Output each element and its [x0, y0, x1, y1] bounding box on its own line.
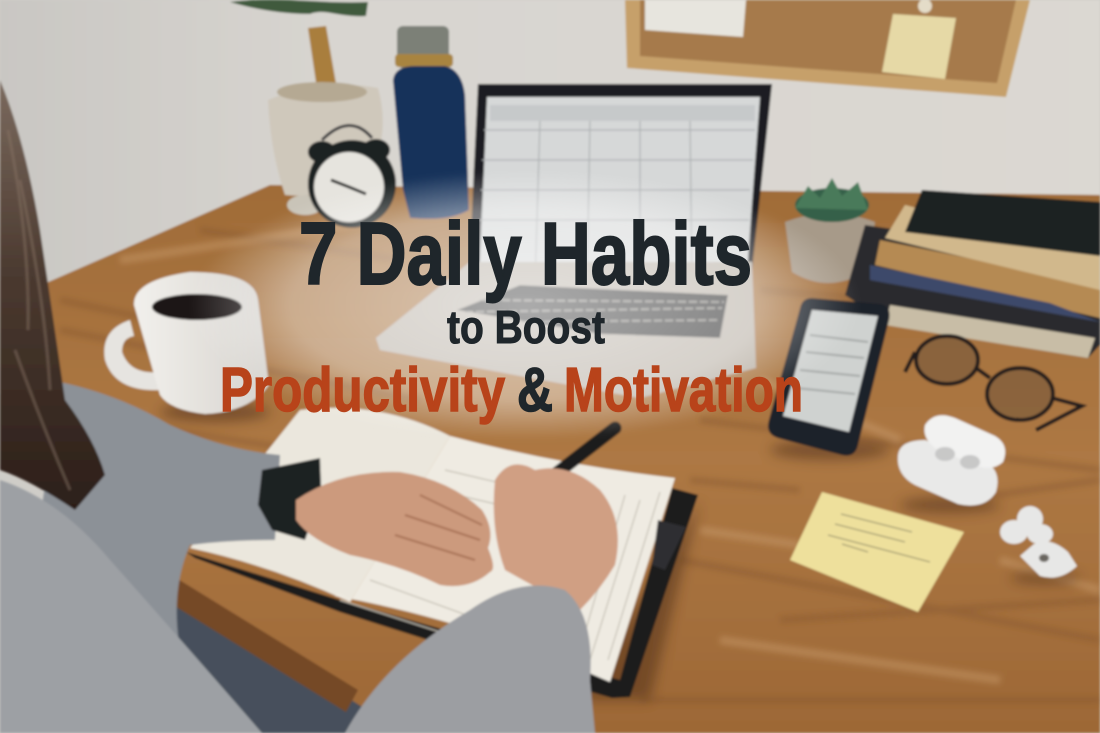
pushpin	[918, 0, 932, 13]
torso sweater	[0, 480, 262, 733]
alarm clock	[287, 125, 396, 228]
laptop base	[376, 262, 756, 398]
right page	[335, 436, 675, 682]
highlight: Productivity & Motivation: Productivity	[220, 356, 505, 425]
phone	[768, 298, 890, 456]
pen	[535, 428, 615, 490]
highlight: Productivity & Motivation: &	[517, 356, 553, 425]
coffee mug	[104, 272, 269, 414]
wall	[0, 0, 1100, 300]
left hand	[296, 472, 493, 586]
right hand	[494, 464, 618, 610]
laptop screen	[468, 84, 772, 290]
stack of books	[845, 190, 1100, 358]
white note on corkboard	[645, 0, 746, 37]
yellow note on corkboard	[882, 14, 956, 79]
highlight: Productivity & Motivation	[220, 356, 803, 425]
notebook	[186, 408, 698, 698]
laptop	[376, 84, 772, 398]
desk front edge and legs	[150, 568, 370, 733]
object shadows	[160, 402, 1080, 700]
wooden desk	[30, 185, 1100, 733]
highlight: Productivity & Motivation: Motivation	[564, 356, 803, 425]
left page	[190, 408, 450, 602]
corkboard	[625, 0, 1030, 97]
eyeglasses	[905, 336, 1082, 430]
sticky note	[790, 492, 964, 612]
notebook strap	[652, 520, 686, 570]
subhead: to Boost: to Boost	[447, 301, 605, 353]
title	[220, 204, 803, 425]
smartwatch	[258, 458, 322, 540]
potted plant	[230, 0, 383, 196]
right sleeve	[345, 586, 595, 733]
loose earbuds	[1000, 506, 1077, 578]
long hair	[0, 80, 105, 510]
navy water bottle	[393, 26, 469, 219]
headline: 7 Daily Habits: 7 Daily Habits	[299, 204, 752, 303]
earbud case	[898, 415, 1005, 506]
left arm sleeve	[40, 382, 280, 650]
notebook cover	[186, 488, 698, 698]
keyboard	[457, 285, 728, 338]
white glow behind title	[190, 170, 860, 440]
succulent in pot	[785, 178, 875, 283]
